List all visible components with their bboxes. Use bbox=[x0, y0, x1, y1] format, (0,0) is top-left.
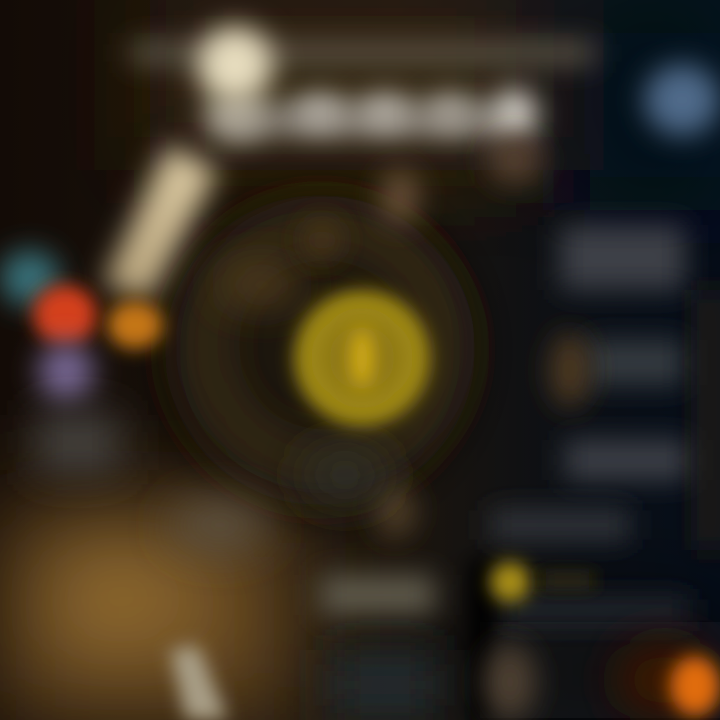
bottom centre block bbox=[170, 575, 536, 720]
panel: central dial bbox=[165, 169, 475, 549]
icon: yellow bullet bbox=[490, 562, 595, 602]
light streak bbox=[102, 145, 218, 300]
icon: blue glow bbox=[644, 64, 720, 136]
title bbox=[130, 27, 595, 184]
icon: yellow coin bbox=[294, 290, 430, 426]
left colour blobs bbox=[0, 250, 163, 470]
icon: orange glow bbox=[615, 640, 720, 720]
right text blocks bbox=[470, 225, 720, 720]
